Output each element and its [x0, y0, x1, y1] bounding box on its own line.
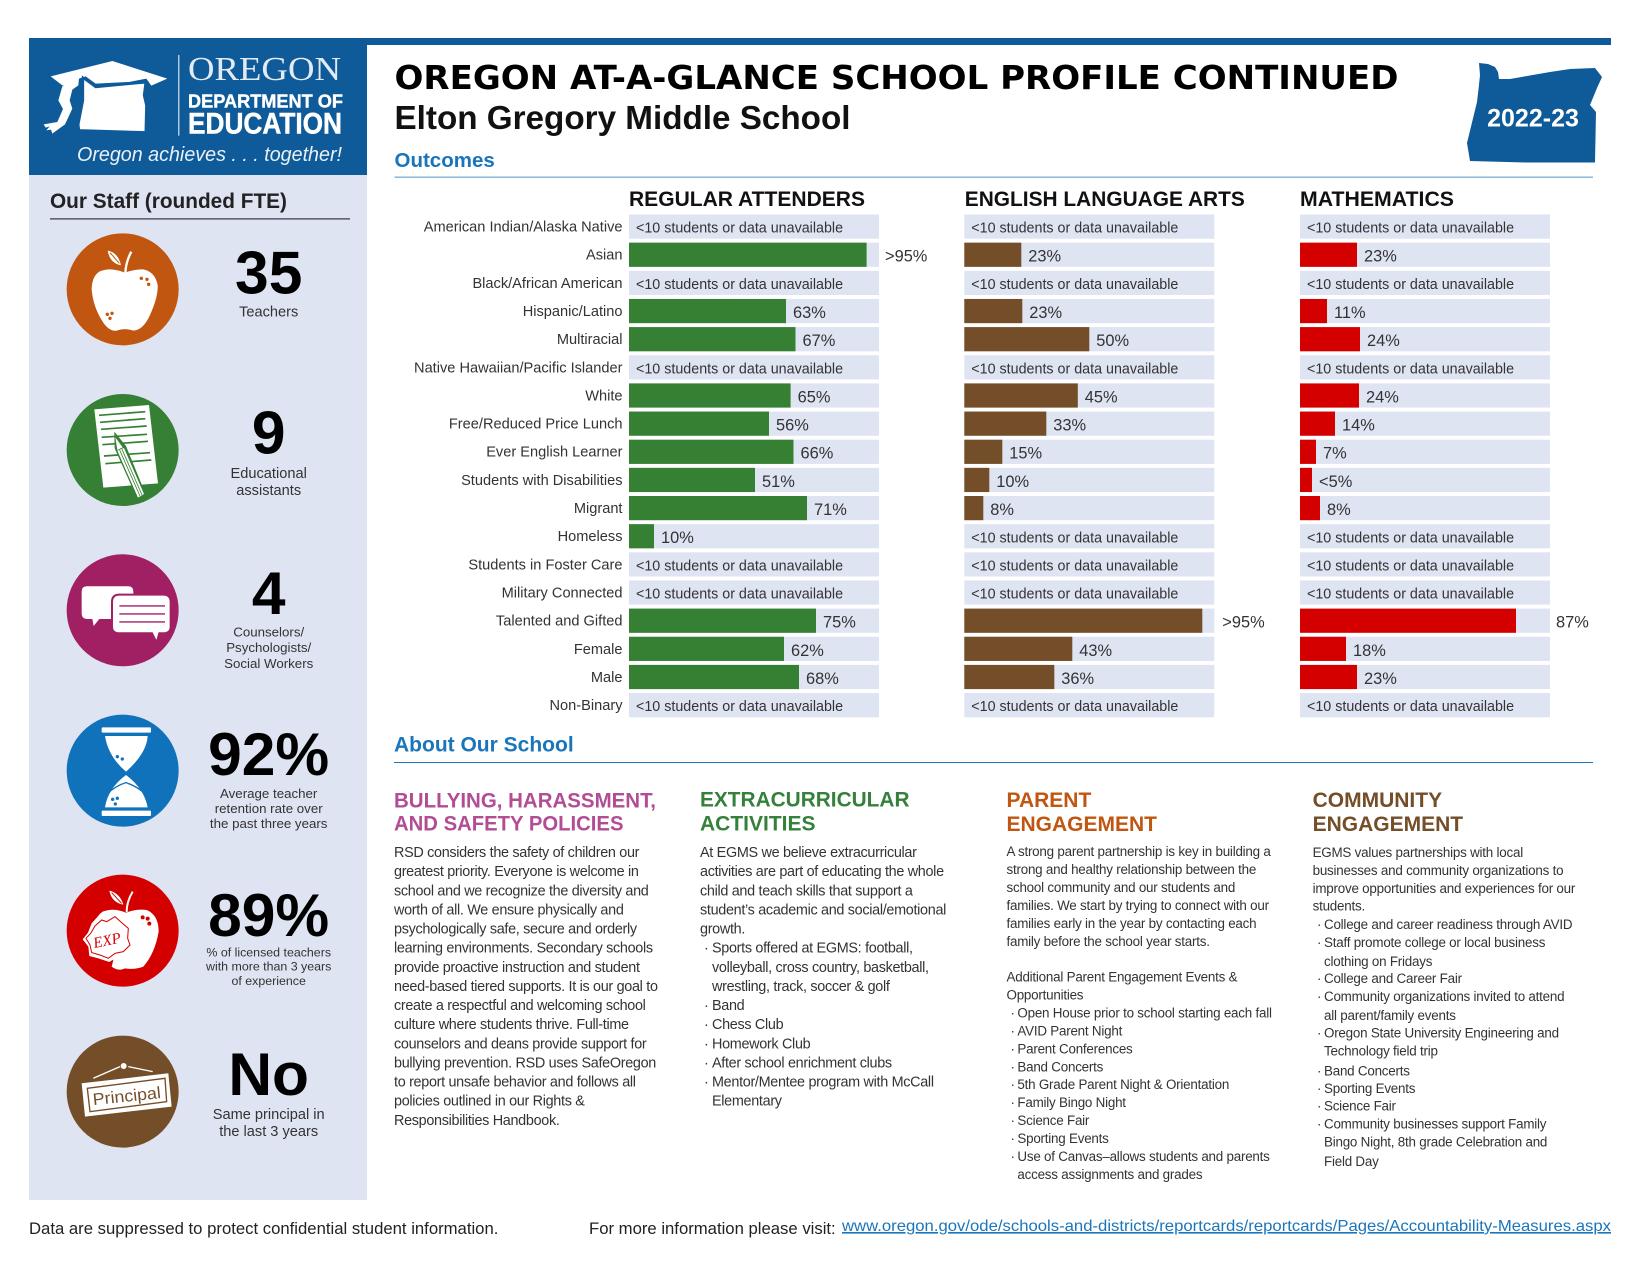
panel: extracurricular activities: At EGMS we believe extracurricular	[700, 845, 917, 861]
stat: teachers: Teachers	[239, 305, 298, 321]
panel: extracurricular activities: Band	[712, 998, 745, 1014]
panel: extracurricular activities: child and teach skills that support a	[700, 883, 913, 899]
footer link	[589, 1218, 1611, 1238]
top rule	[29, 38, 1611, 45]
stat: counselors: 4	[252, 559, 286, 627]
stat: educational assistants: 9	[252, 398, 286, 466]
panel: parent engagement: Family Bingo Night	[1017, 1095, 1126, 1110]
footer link: www.oregon.gov/ode/schools-and-districts/reportcards/reportcards/Pages/Accountability-Measures.aspx	[841, 1218, 1611, 1235]
panel: parent engagement: Open House prior to school starting each fall	[1017, 1006, 1272, 1020]
panel: parent engagement: Use of Canvas–allows students and parents	[1017, 1149, 1270, 1164]
panel: parent engagement: ·	[1010, 1149, 1015, 1164]
chart: mathematics	[1300, 188, 1589, 717]
chart: mathematics: <10 students or data unavailable	[1307, 221, 1514, 237]
panel: bullying policies: AND SAFETY POLICIES	[394, 813, 624, 836]
panel: bullying policies: counselors and deans provide support for	[394, 1036, 647, 1052]
icon: apple teachers	[67, 233, 179, 345]
school name: Elton Gregory Middle School	[394, 99, 850, 136]
panel: parent engagement: ENGAGEMENT	[1006, 813, 1157, 836]
panel: community engagement: ·	[1317, 1081, 1321, 1096]
panel: community engagement: Sporting Events	[1324, 1081, 1416, 1096]
panel: community engagement: College and Career Fair	[1324, 971, 1463, 986]
panel: parent engagement	[1006, 789, 1272, 1182]
panel: parent engagement: ·	[1010, 1131, 1015, 1146]
logo: Oregon Department of Education: Oregon achieves . . . together!	[77, 143, 342, 166]
panel: bullying policies: psychologically safe, secure and orderly	[394, 922, 638, 938]
panel: bullying policies: need-based tiered supports. It is our goal to	[394, 979, 658, 995]
icon: principal sign	[67, 1036, 179, 1148]
row labels: Non-Binary	[550, 698, 623, 714]
panel: parent engagement: ·	[1010, 1041, 1015, 1056]
chart: mathematics: 24%	[1366, 388, 1399, 406]
chart: mathematics: MATHEMATICS	[1300, 188, 1454, 211]
panel: community engagement: Oregon State University Engineering and	[1324, 1026, 1559, 1040]
chart: mathematics: 24%	[1367, 332, 1400, 350]
panel: community engagement: College and career readiness through AVID	[1324, 917, 1573, 932]
panel: community engagement: Community businesses support Family	[1324, 1116, 1547, 1131]
stat: educational assistants: Educational	[231, 466, 307, 482]
chart: regular attenders: 62%	[791, 642, 824, 660]
panel: parent engagement: Science Fair	[1017, 1113, 1090, 1128]
chart: regular attenders: 63%	[793, 304, 826, 322]
chart: english language arts: 10%	[996, 473, 1029, 491]
panel: parent engagement: family before the school year starts.	[1006, 934, 1210, 949]
panel: community engagement: ·	[1317, 989, 1321, 1004]
panel: bullying policies: worth of all. We ensure physically and	[393, 902, 624, 918]
stat: teacher retention: the past three years	[210, 816, 328, 831]
icon: hourglass	[67, 715, 179, 827]
stat: licensed teachers experience: of experience	[231, 974, 306, 988]
panel: parent engagement: A strong parent partnership is key in building a	[1006, 844, 1271, 859]
chart: english language arts: <10 students or data unavailable	[971, 558, 1178, 574]
panel: community engagement: Band Concerts	[1324, 1063, 1410, 1078]
row labels: Hispanic/Latino	[523, 304, 622, 320]
chart: mathematics: 18%	[1353, 642, 1386, 660]
panel: extracurricular activities: Chess Club	[712, 1017, 784, 1033]
chart: english language arts: 23%	[1028, 248, 1061, 266]
chart: english language arts: <10 students or data unavailable	[971, 277, 1178, 293]
stat: same principal	[213, 1040, 325, 1140]
panel: extracurricular activities: ·	[704, 998, 708, 1014]
row labels: American Indian/Alaska Native	[424, 220, 622, 236]
chart: english language arts: 33%	[1053, 417, 1086, 435]
stat: teacher retention: Average teacher	[220, 786, 318, 801]
row labels	[414, 220, 623, 714]
panel: extracurricular activities: ·	[704, 1075, 708, 1091]
chart: mathematics: 23%	[1364, 248, 1397, 266]
chart: english language arts: 8%	[990, 501, 1014, 519]
chart: english language arts: <10 students or data unavailable	[971, 530, 1178, 546]
panel: parent engagement: families early in the year by contacting each	[1006, 916, 1256, 931]
panel: community engagement: ·	[1317, 935, 1321, 950]
heading: Outcomes: Outcomes	[394, 149, 495, 172]
chart: mathematics: <10 students or data unavailable	[1307, 361, 1514, 377]
panel: community engagement: students.	[1313, 898, 1365, 913]
chart: english language arts: 15%	[1009, 445, 1042, 463]
stat: counselors	[224, 559, 314, 671]
row labels: Multiracial	[557, 332, 622, 348]
icon: bitten apple EXP	[67, 875, 179, 987]
panel: community engagement: ·	[1317, 1026, 1321, 1040]
chart: regular attenders: 71%	[814, 501, 847, 519]
panel: extracurricular activities: student’s academic and social/emotional	[700, 902, 946, 918]
chart: regular attenders: <10 students or data unavailable	[636, 699, 843, 715]
chart: english language arts: 36%	[1061, 670, 1094, 688]
row labels: Military Connected	[502, 586, 622, 602]
panel: parent engagement: ·	[1010, 1077, 1015, 1092]
panel: community engagement: Bingo Night, 8th grade Celebration and	[1324, 1134, 1547, 1149]
panel: community engagement: ·	[1317, 971, 1321, 986]
panel: extracurricular activities: Mentor/Mentee program with McCall	[712, 1075, 934, 1091]
panel: parent engagement: strong and healthy relationship between the	[1006, 862, 1256, 877]
panel: parent engagement: school community and our students and	[1006, 880, 1235, 895]
chart: regular attenders: 56%	[776, 417, 809, 435]
chart: mathematics: <10 students or data unavailable	[1307, 277, 1514, 293]
panel: parent engagement: ·	[1010, 1095, 1015, 1110]
stat: educational assistants	[231, 398, 307, 499]
panel: bullying policies: provide proactive instruction and student	[394, 960, 640, 976]
panel: community engagement: Field Day	[1324, 1154, 1379, 1169]
panel: bullying policies: learning environments. Secondary schools	[394, 941, 653, 957]
row labels: Asian	[586, 248, 622, 264]
logo: Oregon Department of Education	[29, 38, 367, 175]
heading: About Our School: About Our School	[394, 734, 574, 757]
panel: parent engagement: PARENT	[1006, 789, 1091, 812]
panel: parent engagement: ·	[1010, 1006, 1015, 1020]
chart: mathematics: 8%	[1327, 501, 1351, 519]
chart: english language arts: <10 students or data unavailable	[971, 221, 1178, 237]
panel: extracurricular activities: ·	[704, 1055, 708, 1071]
chart: mathematics: <10 students or data unavailable	[1307, 558, 1514, 574]
icon: Oregon state with school year: 2022-23	[1487, 105, 1579, 133]
chart: regular attenders: <10 students or data unavailable	[636, 277, 843, 293]
panel: bullying policies: create a respectful and welcoming school	[394, 998, 646, 1014]
chart: mathematics: <10 students or data unavailable	[1307, 530, 1514, 546]
panel: community engagement: ·	[1317, 1063, 1321, 1078]
chart: regular attenders: 10%	[661, 529, 694, 547]
panel: parent engagement: 5th Grade Parent Night & Orientation	[1017, 1077, 1229, 1092]
stat: same principal: No	[228, 1040, 309, 1108]
chart: mathematics: <5%	[1319, 473, 1352, 491]
logo: Oregon Department of Education: DEPARTMENT OF	[188, 91, 343, 112]
chart: english language arts: <10 students or data unavailable	[971, 587, 1178, 603]
stat: educational assistants: assistants	[236, 483, 301, 499]
panel: community engagement: businesses and community organizations to	[1313, 863, 1563, 878]
panel: staff sidebar	[29, 175, 367, 1200]
panel: community engagement: Technology field trip	[1324, 1044, 1438, 1058]
panel: community engagement: ENGAGEMENT	[1313, 813, 1463, 836]
panel: extracurricular activities: ·	[704, 941, 708, 957]
panel: community engagement: ·	[1317, 917, 1321, 932]
panel: bullying policies: bullying prevention. RSD uses SafeOregon	[394, 1055, 656, 1071]
panel: extracurricular activities: ACTIVITIES	[700, 813, 816, 836]
row labels: Talented and Gifted	[496, 614, 622, 630]
stat: same principal: Same principal in	[213, 1107, 325, 1123]
panel: community engagement	[1313, 789, 1576, 1169]
chart: mathematics: 14%	[1342, 417, 1375, 435]
stat: counselors: Social Workers	[224, 656, 314, 671]
stat: counselors: Psychologists/	[226, 640, 311, 655]
chart: english language arts: >95%	[1222, 614, 1265, 632]
row labels: Female	[574, 642, 622, 658]
panel: bullying policies: RSD considers the safety of children our	[394, 845, 640, 861]
panel: community engagement: ·	[1317, 1116, 1321, 1131]
chart: english language arts: 23%	[1029, 304, 1062, 322]
chart: mathematics: 87%	[1556, 614, 1589, 632]
icon: bitten apple EXP: EXP	[91, 930, 123, 952]
row labels: Native Hawaiian/Pacific Islander	[414, 360, 623, 376]
stat: same principal: the last 3 years	[219, 1124, 318, 1140]
panel: community engagement: all parent/family events	[1324, 1008, 1456, 1023]
row labels: Students in Foster Care	[468, 557, 622, 573]
footnote: Data are suppressed to protect confidential student information.	[29, 1219, 498, 1238]
panel: community engagement: Community organizations invited to attend	[1324, 989, 1564, 1004]
panel: parent engagement: Parent Conferences	[1017, 1041, 1133, 1056]
panel: extracurricular activities: volleyball, cross country, basketball,	[712, 960, 929, 976]
chart: regular attenders: REGULAR ATTENDERS	[629, 188, 865, 211]
stat: counselors: Counselors/	[233, 625, 304, 640]
panel: bullying policies: greatest priority. Everyone is welcome in	[394, 864, 639, 880]
panel: parent engagement: Band Concerts	[1017, 1059, 1104, 1074]
chart: regular attenders: 75%	[823, 614, 856, 632]
row labels: White	[585, 388, 622, 404]
panel: parent engagement: Sporting Events	[1017, 1131, 1109, 1146]
chart: regular attenders: 65%	[798, 388, 830, 406]
panel: bullying policies: Responsibilities Handbook.	[394, 1113, 560, 1129]
icon: speech bubbles	[67, 554, 179, 666]
chart: mathematics: 23%	[1364, 670, 1397, 688]
panel: bullying policies: school and we recognize the diversity and	[394, 883, 649, 899]
chart: english language arts: 50%	[1096, 332, 1129, 350]
panel: extracurricular activities: activities are part of educating the whole	[700, 864, 944, 880]
chart: regular attenders: 51%	[762, 473, 795, 491]
chart: regular attenders: <10 students or data unavailable	[636, 558, 843, 574]
panel: community engagement: Science Fair	[1324, 1099, 1397, 1114]
panel: bullying policies: to report unsafe behavior and follows all	[394, 1075, 636, 1091]
row labels: Ever English Learner	[486, 445, 623, 461]
stat: teacher retention: retention rate over	[215, 801, 323, 816]
panel: extracurricular activities	[700, 789, 946, 1110]
chart: regular attenders: <10 students or data unavailable	[636, 587, 843, 603]
panel: community engagement: ·	[1317, 1099, 1321, 1114]
icon: Oregon state with school year	[1467, 63, 1602, 162]
panel: parent engagement: Additional Parent Engagement Events &	[1006, 970, 1238, 985]
panel: extracurricular activities: ·	[704, 1036, 708, 1052]
chart: regular attenders	[629, 188, 927, 717]
row labels: Black/African American	[472, 276, 622, 292]
row labels: Students with Disabilities	[461, 473, 622, 489]
stat: teacher retention	[208, 720, 329, 831]
panel: community engagement: Staff promote college or local business	[1324, 935, 1546, 950]
panel: extracurricular activities: wrestling, track, soccer & golf	[711, 979, 891, 995]
stat: licensed teachers experience: with more than 3 years	[205, 960, 331, 974]
panel: extracurricular activities: ·	[704, 1017, 708, 1033]
panel: parent engagement: ·	[1010, 1023, 1015, 1038]
panel: parent engagement: Opportunities	[1006, 988, 1084, 1002]
icon: paper and pencil	[67, 394, 179, 506]
stat: licensed teachers experience: % of licensed teachers	[206, 946, 331, 960]
chart: english language arts	[964, 188, 1265, 717]
panel: parent engagement: ·	[1010, 1059, 1015, 1074]
chart: english language arts: 43%	[1079, 642, 1112, 660]
stat: teacher retention: 92%	[208, 720, 329, 788]
panel: extracurricular activities: Elementary	[712, 1094, 783, 1110]
panel: parent engagement: AVID Parent Night	[1017, 1023, 1123, 1038]
panel: extracurricular activities: Sports offered at EGMS: football,	[712, 941, 913, 957]
panel: community engagement: improve opportunities and experiences for our	[1313, 881, 1576, 896]
chart: mathematics: <10 students or data unavailable	[1307, 699, 1514, 715]
stat: licensed teachers experience: 89%	[208, 881, 329, 949]
chart: regular attenders: 67%	[802, 332, 835, 350]
logo: Oregon Department of Education: OREGON	[188, 51, 341, 88]
panel: extracurricular activities: After school enrichment clubs	[712, 1055, 892, 1071]
chart: regular attenders: <10 students or data unavailable	[636, 361, 843, 377]
panel: bullying policies: policies outlined in our Rights &	[394, 1094, 585, 1110]
chart: regular attenders: >95%	[885, 248, 927, 266]
panel: community engagement: clothing on Fridays	[1324, 954, 1433, 969]
panel: parent engagement: ·	[1010, 1113, 1015, 1128]
panel: community engagement: COMMUNITY	[1313, 789, 1442, 812]
row labels: Free/Reduced Price Lunch	[449, 417, 622, 433]
panel: parent engagement: families. We start by trying to connect with our	[1006, 898, 1270, 913]
panel: extracurricular activities: growth.	[700, 922, 745, 938]
chart: english language arts: 45%	[1085, 388, 1118, 406]
chart: regular attenders: <10 students or data unavailable	[636, 221, 843, 237]
chart: mathematics: <10 students or data unavailable	[1307, 587, 1514, 603]
panel: extracurricular activities: Homework Club	[712, 1036, 811, 1052]
row labels: Migrant	[574, 501, 622, 517]
row labels: Homeless	[558, 529, 622, 545]
chart: english language arts: <10 students or data unavailable	[971, 699, 1178, 715]
logo: Oregon Department of Education: EDUCATION	[188, 108, 342, 141]
chart: english language arts: <10 students or data unavailable	[971, 361, 1178, 377]
panel: community engagement: EGMS values partnerships with local	[1313, 845, 1523, 860]
footer link: For more information please visit:	[589, 1219, 836, 1238]
panel: parent engagement: access assignments and grades	[1017, 1167, 1203, 1182]
chart: regular attenders: 68%	[806, 670, 839, 688]
panel: bullying policies	[393, 790, 658, 1129]
stat: teachers: 35	[235, 238, 302, 306]
chart: mathematics: 7%	[1323, 445, 1347, 463]
panel: bullying policies: BULLYING, HARASSMENT,	[394, 790, 656, 812]
heading: Our Staff: Our Staff (rounded FTE)	[50, 190, 287, 213]
chart: english language arts: ENGLISH LANGUAGE ARTS	[965, 188, 1245, 211]
panel: bullying policies: culture where students thrive. Full-time	[394, 1017, 629, 1033]
chart: mathematics: 11%	[1334, 304, 1366, 322]
row labels: Male	[591, 670, 622, 686]
stat: licensed teachers experience	[205, 881, 331, 988]
panel: extracurricular activities: EXTRACURRICULAR	[700, 789, 910, 812]
title: OREGON AT-A-GLANCE SCHOOL PROFILE CONTINUED	[394, 58, 1398, 97]
chart: regular attenders: 66%	[800, 445, 833, 463]
icon: principal sign: Principal	[92, 1083, 162, 1109]
